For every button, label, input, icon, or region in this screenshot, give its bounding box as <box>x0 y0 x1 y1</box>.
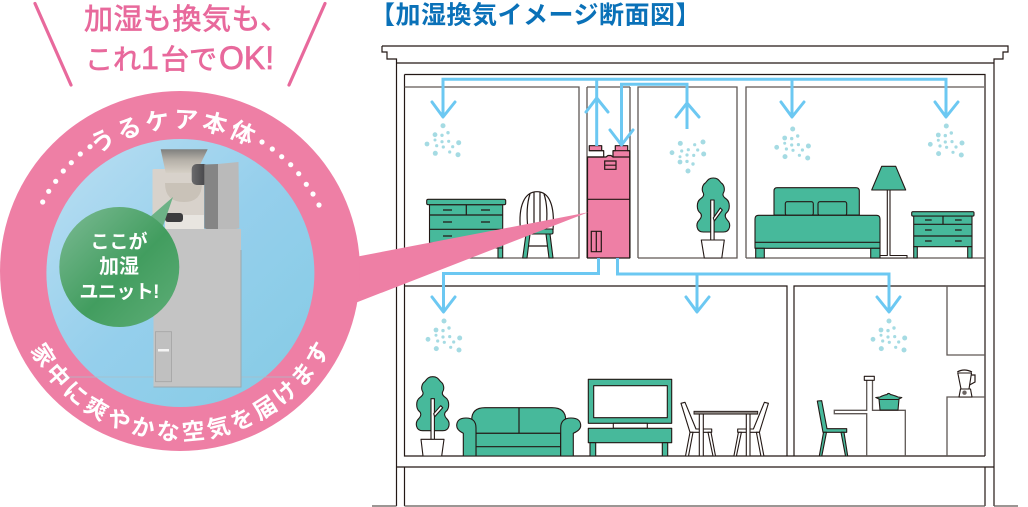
floor line <box>62 376 300 378</box>
kitchen counter and hood <box>834 376 905 456</box>
speech bubble: ユニット! <box>80 282 160 303</box>
blender <box>957 370 975 397</box>
chair upstairs <box>520 192 553 258</box>
blue inner disc <box>46 139 314 407</box>
arrow heads, upper floor <box>432 102 958 117</box>
television on console <box>588 379 672 456</box>
sofa <box>457 408 581 456</box>
unit arrows <box>586 98 699 145</box>
air ducts and arrows <box>432 79 958 312</box>
product photo: main cabinet <box>154 229 241 387</box>
kitchen chair <box>817 401 848 456</box>
headline: OK! <box>219 40 274 76</box>
bed <box>755 188 880 258</box>
pink ring and pointer <box>350 212 588 305</box>
speech bubble: 加湿 <box>99 255 139 278</box>
potted plant downstairs <box>416 377 449 456</box>
headline: 台で <box>161 44 217 75</box>
headline accent slashes <box>35 4 325 85</box>
callout circle <box>0 91 588 451</box>
headline: これ <box>85 44 141 75</box>
curved label: top: うるケア本体 <box>92 110 256 152</box>
lower floor ducts <box>444 258 889 311</box>
exhaust duct, upper floor <box>597 79 687 146</box>
floor lamp <box>872 166 907 258</box>
cooking pot <box>876 393 902 410</box>
title: 【加湿換気イメージ断面図】 <box>370 2 701 30</box>
headline <box>84 3 290 76</box>
headline: 1 <box>141 40 159 76</box>
potted plant upstairs <box>697 178 730 258</box>
dresser <box>912 212 974 258</box>
ventilation unit <box>588 146 630 258</box>
curved label: bottom: 家中に爽やかな空気を届けます <box>30 341 326 442</box>
supply duct, upper floor <box>443 79 946 117</box>
speech bubble <box>59 197 179 327</box>
speech bubble: ここが <box>90 230 148 253</box>
headline: 加湿も換気も、 <box>84 3 290 36</box>
house section outline <box>372 46 1018 506</box>
decorative dots on ring <box>40 139 322 208</box>
furniture: chest of drawers upstairs left <box>427 199 506 258</box>
arrow heads, lower floor <box>432 297 900 312</box>
mist particles <box>425 123 965 352</box>
product photo: wet unit <box>152 149 241 387</box>
dining table and chairs <box>681 402 768 456</box>
